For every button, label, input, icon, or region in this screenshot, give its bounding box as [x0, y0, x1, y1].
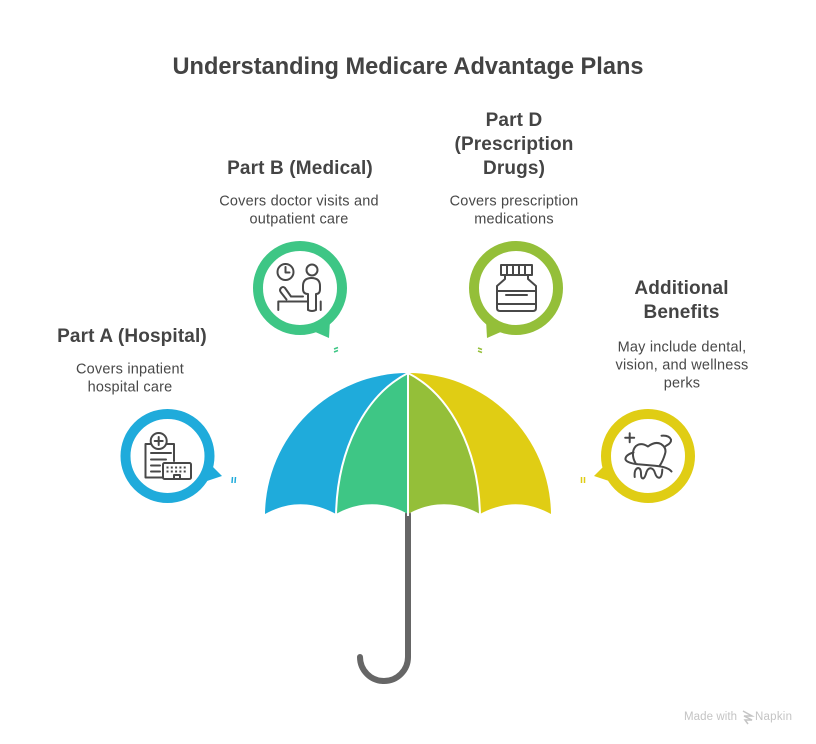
description: Additional Benefits: vision, and wellness	[616, 358, 748, 374]
section: Part A	[57, 326, 236, 498]
heading: Part D: (Prescription	[454, 134, 574, 155]
section: Part D	[450, 110, 578, 352]
heading: Part A: Part A (Hospital)	[57, 326, 207, 347]
badge: Part B	[258, 246, 342, 338]
watermark	[684, 711, 792, 724]
description: Part D: medications	[474, 212, 554, 228]
umbrella handle	[360, 514, 408, 681]
heading: Additional Benefits: Benefits	[643, 302, 720, 323]
description: Part B: Covers doctor visits and	[219, 194, 379, 210]
umbrella	[265, 372, 551, 681]
badge: Part D	[474, 246, 558, 338]
watermark: Made with	[684, 711, 737, 723]
icon: tooth	[625, 433, 672, 478]
heading: Additional Benefits: Additional	[634, 278, 729, 299]
canopy panel: green	[336, 373, 408, 514]
icon: doctor and patient	[278, 264, 321, 311]
badge: Part A	[126, 414, 222, 498]
description: Part A: Covers inpatient	[76, 362, 184, 378]
connector mark: Additional Benefits	[582, 477, 584, 483]
heading: Part B: Part B (Medical)	[227, 158, 373, 179]
description: Part D: Covers prescription	[450, 194, 578, 210]
icon: hospital chart	[146, 433, 191, 479]
description: Additional Benefits: May include dental,	[618, 340, 746, 356]
badge: Additional Benefits	[594, 414, 690, 498]
heading: Part D: Part D	[486, 110, 542, 131]
watermark: Napkin	[755, 711, 792, 723]
heading: Part D: Drugs)	[483, 158, 545, 179]
connector mark: Part B	[334, 348, 338, 352]
icon: Napkin logo	[743, 711, 752, 724]
connector mark: Part D	[478, 348, 482, 352]
section: Part B	[219, 158, 379, 352]
description: Part B: outpatient care	[250, 212, 348, 228]
description: Part A: hospital care	[88, 380, 172, 396]
description: Additional Benefits: perks	[664, 376, 700, 392]
title: Understanding Medicare Advantage Plans	[172, 53, 644, 80]
connector mark: Part A	[232, 477, 236, 483]
canopy panel: yellow	[408, 373, 551, 514]
canopy panel: blue	[265, 373, 408, 514]
canopy panel: olive	[408, 373, 480, 514]
section: Additional Benefits	[582, 278, 748, 498]
icon: medicine bottle	[497, 265, 536, 311]
